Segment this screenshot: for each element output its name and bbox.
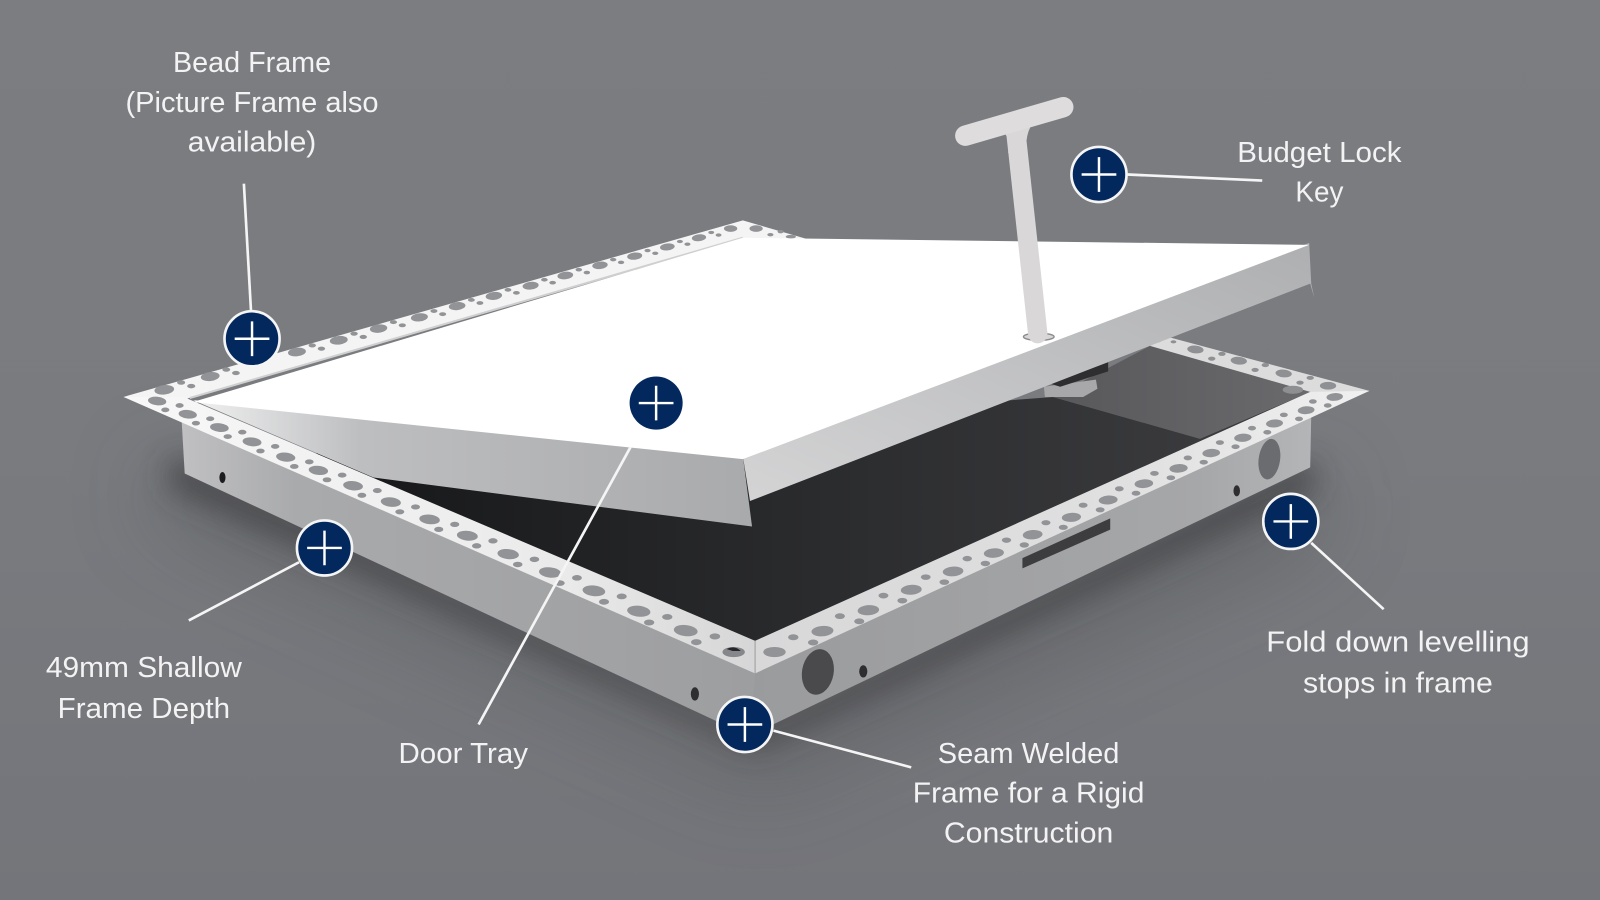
- marker: levelling stops: [1263, 494, 1318, 549]
- back-left frame strip: [123, 220, 806, 399]
- label: seam welded frame: Construction: [944, 817, 1113, 849]
- label: levelling stops: Fold down levelling: [1266, 627, 1530, 659]
- door tray left side: [193, 400, 752, 527]
- floor shadow, tight: [168, 454, 1316, 750]
- front-right frame strip: [755, 391, 1369, 673]
- leader lines: [189, 174, 1384, 767]
- label: budget lock key: Key: [1295, 177, 1344, 209]
- interior floor: [306, 392, 1310, 641]
- label: budget lock key: Budget Lock: [1237, 137, 1402, 169]
- marker: bead frame: [224, 311, 280, 366]
- interior back wall: [1053, 346, 1310, 439]
- label: levelling stops: [1266, 627, 1530, 699]
- budget lock key: [965, 107, 1063, 340]
- floor shadow, wide: [153, 459, 1327, 786]
- label: frame depth: [46, 652, 242, 725]
- door tray right side: [743, 243, 1314, 501]
- front-left frame strip: [123, 396, 755, 673]
- label: seam welded frame: Seam Welded: [938, 738, 1119, 770]
- label: frame depth: Frame Depth: [58, 693, 230, 725]
- frame right outer wall: [750, 416, 1311, 737]
- label: frame depth: 49mm Shallow: [46, 652, 242, 684]
- label: seam welded frame: Frame for a Rigid: [913, 778, 1144, 810]
- marker: seam welded: [717, 697, 772, 752]
- label: door tray: Door Tray: [398, 738, 529, 770]
- label: bead frame: Bead Frame: [173, 47, 331, 79]
- key lock mechanism: [1044, 362, 1108, 397]
- marker: door tray: [630, 377, 683, 430]
- marker: budget lock key: [1071, 147, 1127, 202]
- label: seam welded frame: [913, 738, 1144, 849]
- label: budget lock key: [1237, 137, 1402, 209]
- label: levelling stops: stops in frame: [1303, 667, 1493, 699]
- wall holes and slot: [219, 437, 1283, 701]
- label: bead frame: [126, 47, 379, 159]
- label: bead frame: available): [188, 127, 316, 159]
- access panel illustration: [123, 107, 1369, 737]
- frame left outer wall: [182, 420, 755, 737]
- label: bead frame: (Picture Frame also: [126, 87, 379, 119]
- back-right frame strip: [1150, 337, 1369, 408]
- door tray top face: [193, 238, 1309, 459]
- marker: frame depth: [297, 520, 352, 576]
